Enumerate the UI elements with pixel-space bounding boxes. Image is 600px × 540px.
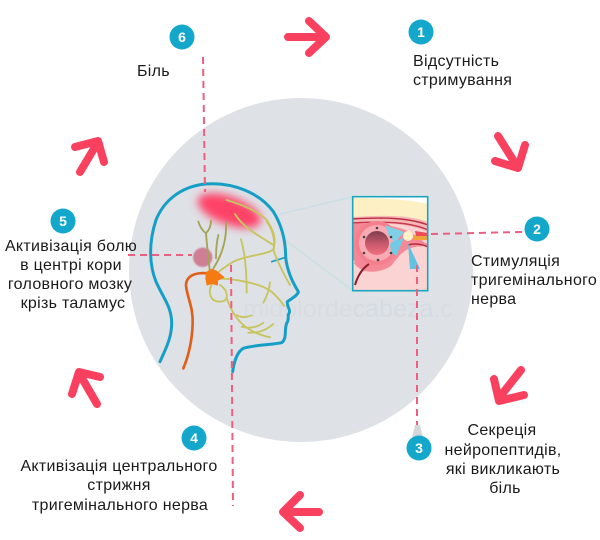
step 1: 1 [417,24,425,40]
step 3: біль [489,480,521,497]
arrow: 4 to 5 [72,372,100,404]
step 2: 2 [533,221,541,237]
step 6 [137,24,194,80]
spinal artery [183,273,212,368]
arrow: 5 to 6 [75,141,104,172]
arrow: 6 to 1 [288,21,326,53]
step 2: нерва [471,291,516,308]
nerve ending [403,231,413,241]
step 3: нейропептидів, [444,442,562,459]
arrow: 2 to 3 [494,370,524,401]
step 2: Стимуляція [471,253,560,270]
step 1: Відсутність [413,53,499,70]
step 5: крізь таламус [21,295,125,312]
step 3 [406,422,562,497]
dashed connector: step 3 to inset [416,265,418,425]
pain area [193,186,265,235]
inset illustration [352,196,428,291]
yellow nerves [210,200,290,337]
head outline [151,184,298,372]
trigeminal ganglion [205,269,225,286]
neuropeptide clusters [385,225,404,243]
step 3: Секреція [467,422,537,439]
step 6: 6 [178,29,186,45]
arrow: 1 to 2 [495,136,525,168]
step 5: в центрі кори [20,257,122,274]
background circle [129,98,473,442]
step 4 [20,426,218,514]
dashed connector: step 6 to pain area [203,57,205,192]
vessel dots [363,227,392,261]
step 5 [5,208,137,312]
step 5: головного мозку [8,276,132,293]
watermark: midolordecabeza.c [243,295,453,323]
step 3: які викликають [446,461,560,478]
dashed connector: step 4 to ganglion [231,265,233,506]
step 4: Активізація центрального [20,458,218,475]
step 2: тригемінального [471,272,597,289]
step 5: Активізація болю [5,238,137,255]
dashed connector: step 2 to nerve ending [431,232,522,234]
step 5: 5 [59,213,67,229]
dashed connector: step 5 to thalamus [128,254,192,256]
step 1 [408,20,512,89]
olive nerves [198,221,226,273]
step 6: Біль [137,63,170,80]
step 1: стримування [413,72,512,89]
step 2 [471,216,597,308]
step 4: 4 [190,430,198,446]
skull layer [354,198,427,222]
step 4: тригемінального нерва [32,497,208,514]
vessel [352,223,428,271]
faint connector lines to inset [280,197,352,290]
step 4: стрижня [87,477,151,494]
head illustration [151,184,298,372]
arrow: 3 to 4 [283,495,319,528]
step 3: 3 [415,440,423,456]
thalamus [193,248,212,267]
